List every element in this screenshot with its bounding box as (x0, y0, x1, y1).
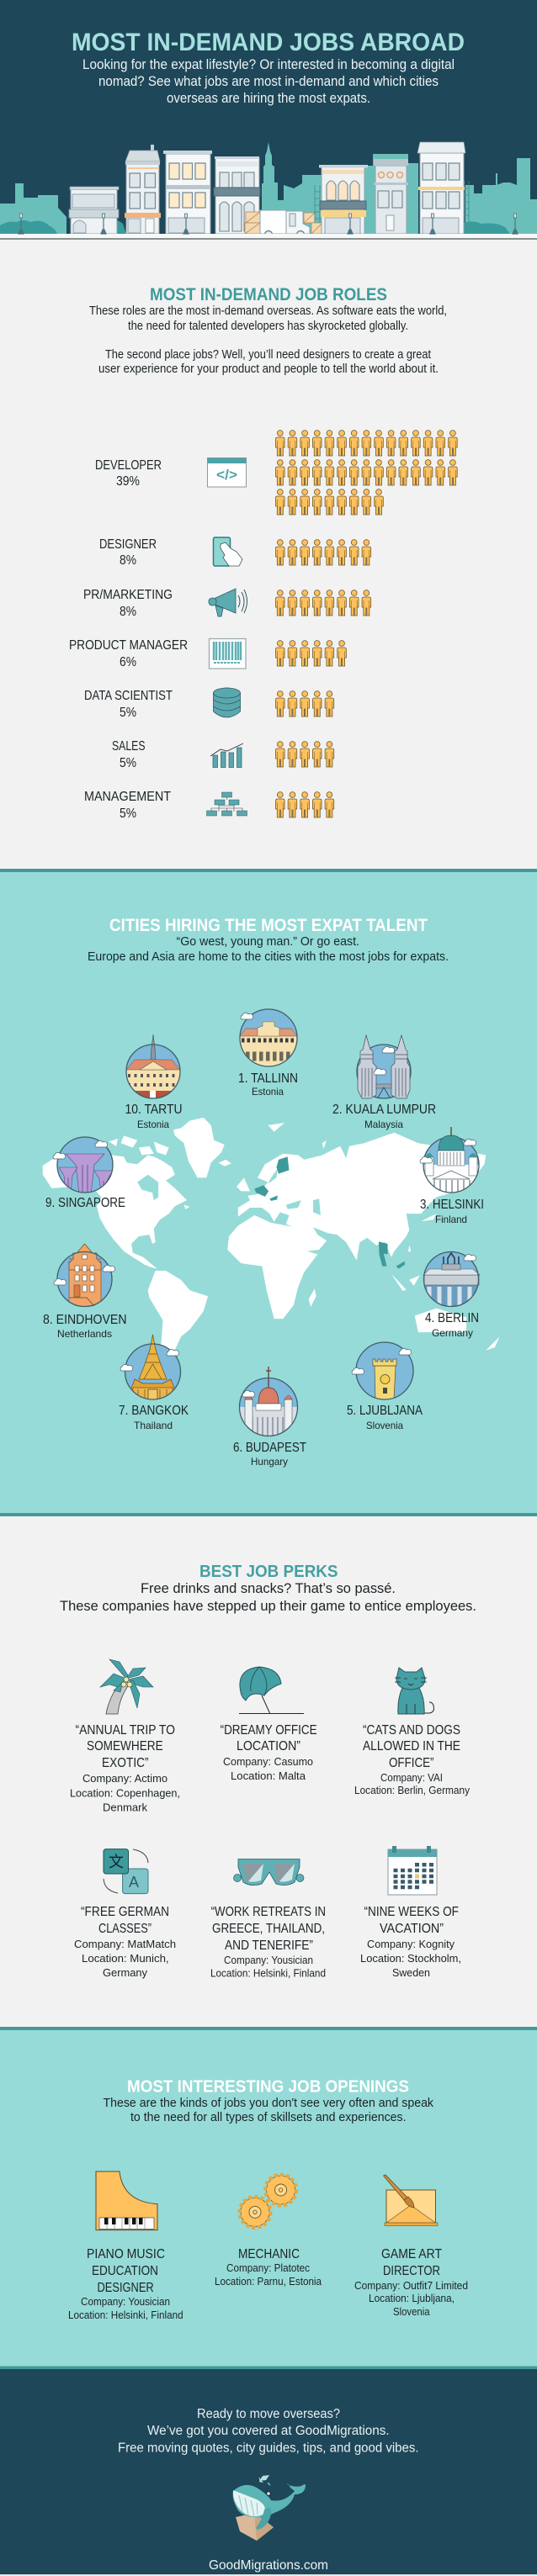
icon: code window (207, 458, 246, 487)
city: 4 Berlin (423, 1251, 480, 1339)
panel: header (0, 0, 537, 240)
job: game art director: Company: Outfit7 Limited (354, 2280, 468, 2292)
footer call to action text: We’ve got you covered at GoodMigrations. (147, 2424, 390, 2438)
job openings intro text (103, 2097, 434, 2124)
perks intro text: These companies have stepped up their game to entice employees. (60, 1599, 476, 1614)
cities intro text: Europe and Asia are home to the cities with the most jobs for expats. (88, 950, 449, 964)
row: product manager (69, 638, 346, 669)
panel: best job perks (60, 1563, 476, 1980)
perk: dreamy office: Location: Malta (231, 1770, 306, 1782)
job: game art director (354, 2175, 468, 2318)
icon: phone and hand (214, 537, 242, 566)
icon: translate (104, 1849, 148, 1894)
header intro text: Looking for the expat lifestyle? Or interested in becoming a digital (82, 57, 455, 72)
job: piano music education designer (68, 2171, 183, 2321)
icon: database (214, 688, 241, 717)
job: mechanic: Company: Platotec (226, 2262, 310, 2274)
job: piano music education designer: PIANO MUSIC (87, 2247, 165, 2261)
icon: calendar (388, 1846, 437, 1895)
row: developer: 39% (116, 474, 140, 489)
perk: dreamy office: LOCATION” (237, 1739, 300, 1753)
job: mechanic (215, 2175, 322, 2288)
icon: org chart (207, 792, 247, 816)
job: game art director: GAME ART (381, 2247, 442, 2261)
perk: work retreats: Company: Yousician (224, 1954, 313, 1966)
city: 10 Tartu (125, 1034, 182, 1130)
building 1 (69, 187, 119, 234)
city: 3 Helsinki: 3. HELSINKI (420, 1198, 484, 1212)
city: 2 Kuala Lumpur (332, 1035, 436, 1130)
perk: dreamy office: Company: Casumo (223, 1756, 313, 1768)
heading: perks: BEST JOB PERKS (199, 1563, 338, 1581)
perk: german classes: Company: MatMatch (74, 1939, 176, 1950)
city: 10 Tartu: Estonia (137, 1119, 169, 1130)
icon: cat (395, 1668, 433, 1714)
row: developer (95, 431, 457, 515)
world map (43, 1110, 499, 1364)
icon: sunglasses (234, 1859, 304, 1886)
row: sales: 5% (120, 756, 136, 770)
header intro text: overseas are hiring the most expats. (167, 91, 370, 106)
job openings intro text: to the need for all types of skillsets and experiences. (130, 2111, 406, 2124)
perk: cats and dogs: ALLOWED IN THE (363, 1739, 460, 1753)
perk: annual trip: Location: Copenhagen, (70, 1788, 180, 1800)
job: piano music education designer: EDUCATION (92, 2264, 158, 2278)
row: management (84, 790, 334, 821)
row: designer (99, 537, 371, 568)
perk: work retreats: GREECE, THAILAND, (212, 1922, 325, 1936)
footer call to action text (118, 2407, 419, 2456)
icon: grand piano (96, 2171, 157, 2230)
row: sales: SALES (112, 739, 145, 754)
city: 7 Bangkok (119, 1335, 189, 1431)
row: data scientist (84, 688, 334, 720)
city: 5 Ljubljana: Slovenia (366, 1420, 403, 1431)
perk: german classes: Location: Munich, (82, 1953, 169, 1965)
row: management: 5% (120, 807, 136, 821)
perks intro text (60, 1581, 476, 1614)
city: 6 Budapest (233, 1367, 306, 1468)
city: 5 Ljubljana: 5. LJUBLJANA (347, 1404, 423, 1418)
perk: annual trip: SOMEWHERE (87, 1739, 163, 1753)
job openings intro text: These are the kinds of jobs you don't see very often and speak (103, 2097, 434, 2110)
panel: footer (0, 2369, 537, 2576)
perk: work retreats: Location: Helsinki, Finland (210, 1968, 326, 1980)
row: developer: DEVELOPER (95, 458, 162, 473)
job roles intro text: The second place jobs? Well, you’ll need designers to create a great (105, 348, 431, 362)
job roles intro text: the need for talented developers has skyrocketed globally. (128, 320, 408, 333)
perk: german classes (74, 1849, 176, 1979)
perk: german classes: Germany (103, 1967, 148, 1979)
perk: annual trip: “ANNUAL TRIP TO (76, 1723, 175, 1738)
perk: cats and dogs: OFFICE” (389, 1756, 434, 1770)
perk: dreamy office: “DREAMY OFFICE (221, 1723, 317, 1738)
cities intro text (88, 935, 449, 964)
building 6 (374, 159, 408, 234)
job: mechanic: MECHANIC (238, 2247, 300, 2261)
row: product manager: PRODUCT MANAGER (69, 638, 188, 653)
perk: cats and dogs: “CATS AND DOGS (363, 1723, 460, 1738)
job: mechanic: Location: Parnu, Estonia (215, 2276, 322, 2288)
perks intro text: Free drinks and snacks? That’s so passé. (141, 1581, 396, 1596)
job roles intro text: user experience for your product and people to tell the world about it. (98, 362, 439, 376)
perk: nine weeks of vacation: VACATION” (380, 1922, 444, 1936)
perk: annual trip: Denmark (103, 1801, 148, 1813)
city: 4 Berlin: 4. BERLIN (425, 1311, 479, 1325)
row: sales (112, 739, 334, 770)
perk: work retreats: AND TENERIFE” (225, 1939, 313, 1953)
building 2 (125, 145, 161, 234)
icon: translate: A (129, 1874, 139, 1891)
icon: barcode (209, 639, 246, 669)
perk: nine weeks of vacation: Sweden (392, 1967, 430, 1979)
city: 3 Helsinki (420, 1127, 484, 1225)
icon: code window: </> (216, 467, 237, 483)
city: 8 Eindhoven: Netherlands (57, 1328, 112, 1340)
city: 2 Kuala Lumpur: 2. KUALA LUMPUR (332, 1103, 436, 1117)
building 3 (163, 151, 212, 234)
city: 6 Budapest: Hungary (251, 1456, 288, 1468)
city: 7 Bangkok: 7. BANGKOK (119, 1404, 189, 1418)
city: 8 Eindhoven (43, 1244, 126, 1340)
logo: whale on a box (233, 2475, 306, 2541)
city: 6 Budapest: 6. BUDAPEST (233, 1441, 306, 1455)
job roles intro text: These roles are the most in-demand overseas. As software eats the world, (89, 304, 447, 318)
heading: cities: CITIES HIRING THE MOST EXPAT TALENT (109, 916, 428, 935)
perk: annual trip: EXOTIC” (102, 1756, 149, 1770)
row: designer: 8% (120, 553, 136, 568)
perk: nine weeks of vacation: Location: Stockholm, (360, 1953, 461, 1965)
pictogram: 5 people (276, 691, 334, 717)
job: piano music education designer: Company: Yousician (81, 2296, 170, 2308)
heading: job openings: MOST INTERESTING JOB OPENINGS (127, 2077, 409, 2096)
pictogram: 39 people (276, 431, 457, 515)
delivery truck and crates (245, 210, 322, 239)
job roles intro text (89, 304, 447, 376)
row: designer: DESIGNER (99, 537, 157, 552)
city: 4 Berlin: Germany (432, 1327, 473, 1339)
row: management: MANAGEMENT (84, 790, 171, 804)
icon: megaphone (209, 589, 247, 616)
city: 1 Tallinn: Estonia (252, 1086, 284, 1098)
row: pr marketing: 8% (120, 605, 136, 619)
city: 5 Ljubljana (347, 1342, 423, 1431)
pictogram: 8 people (276, 590, 371, 616)
city: 10 Tartu: 10. TARTU (125, 1103, 182, 1117)
job: piano music education designer: Location: Helsinki, Finland (68, 2309, 183, 2321)
row: pr marketing (83, 588, 371, 619)
job: game art director: Location: Ljubljana, (369, 2293, 455, 2304)
city: 1 Tallinn (238, 1009, 298, 1098)
street with lamps (0, 214, 537, 240)
city: 8 Eindhoven: 8. EINDHOVEN (43, 1313, 126, 1327)
title: MOST IN-DEMAND JOBS ABROAD (72, 29, 465, 56)
pictogram: 8 people (276, 540, 371, 565)
icon: translate: 文 (109, 1854, 124, 1870)
heading: job roles: MOST IN-DEMAND JOB ROLES (150, 285, 387, 304)
row: pr marketing: PR/MARKETING (83, 588, 173, 602)
city: 7 Bangkok: Thailand (134, 1420, 173, 1431)
perk: annual trip (70, 1659, 180, 1813)
footer call to action text: Free moving quotes, city guides, tips, and good vibes. (118, 2441, 419, 2456)
icon: beach umbrella (239, 1667, 304, 1714)
building 5 (315, 165, 368, 234)
city: 9 Singapore (45, 1137, 125, 1210)
panel: most in-demand job roles (69, 285, 457, 821)
perk: cats and dogs: Company: VAI (380, 1772, 443, 1784)
icon: rising bar chart (210, 743, 243, 767)
perk: work retreats (210, 1859, 326, 1980)
job: game art director: Slovenia (393, 2306, 430, 2318)
perk: german classes: CLASSES” (98, 1922, 152, 1936)
perk: cats and dogs: Location: Berlin, Germany (354, 1785, 471, 1796)
perk: german classes: “FREE GERMAN (81, 1905, 169, 1919)
panel: most interesting job openings (0, 2027, 537, 2369)
perk: annual trip: Company: Actimo (82, 1773, 167, 1785)
row: data scientist: 5% (120, 706, 136, 720)
row: product manager: 6% (120, 655, 136, 669)
row: data scientist: DATA SCIENTIST (84, 689, 173, 703)
panel: cities hiring the most expat talent (0, 869, 537, 1516)
perk: dreamy office (221, 1667, 317, 1782)
job: piano music education designer: DESIGNER (98, 2281, 154, 2295)
perk: nine weeks of vacation: Company: Kognity (367, 1939, 455, 1950)
city: 9 Singapore: 9. SINGAPORE (45, 1196, 125, 1210)
perk: nine weeks of vacation (360, 1846, 461, 1979)
perk: cats and dogs (354, 1668, 471, 1796)
city: 1 Tallinn: 1. TALLINN (238, 1071, 298, 1086)
building 4 (214, 156, 260, 234)
pictogram: 5 people (276, 792, 334, 817)
icon: gears (239, 2175, 296, 2228)
pictogram: 5 people (276, 742, 334, 767)
cities intro text: “Go west, young man.” Or go east. (177, 935, 359, 949)
icon: paint brush and canvas (384, 2175, 438, 2225)
job: game art director: DIRECTOR (383, 2264, 440, 2278)
header intro text (82, 57, 455, 106)
city: 3 Helsinki: Finland (435, 1214, 467, 1225)
building 7 (417, 142, 469, 234)
website link: GoodMigrations.com (209, 2558, 328, 2573)
illustration: city street skyline (0, 142, 537, 240)
header intro text: nomad? See what jobs are most in-demand and which cities (98, 74, 439, 89)
icon: palm tree (100, 1659, 153, 1714)
perk: nine weeks of vacation: “NINE WEEKS OF (364, 1905, 459, 1919)
perk: work retreats: “WORK RETREATS IN (211, 1905, 326, 1919)
footer call to action text: Ready to move overseas? (197, 2407, 340, 2421)
pictogram: 6 people (276, 641, 346, 666)
city: 2 Kuala Lumpur: Malaysia (364, 1119, 403, 1130)
